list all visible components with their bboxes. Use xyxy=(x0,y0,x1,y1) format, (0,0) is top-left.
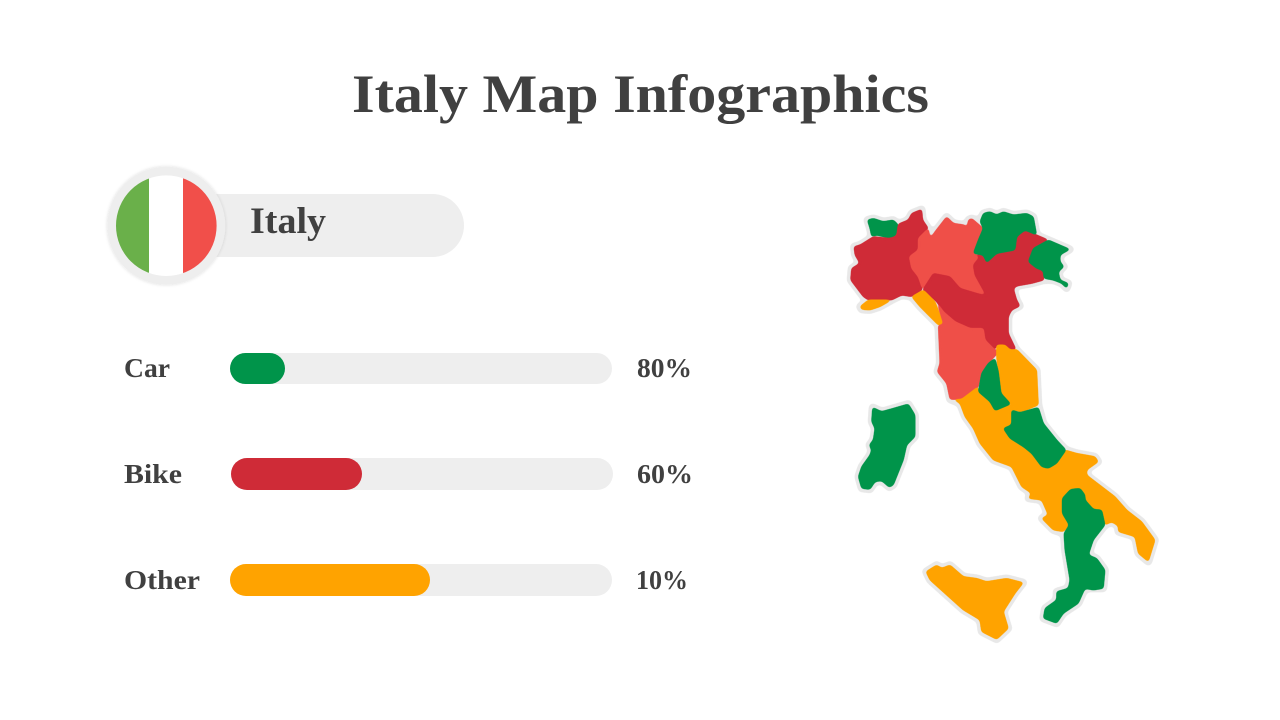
region: Umbria xyxy=(978,358,1011,411)
bar row: Car 80%: 80% xyxy=(637,353,692,383)
region: Tuscany xyxy=(937,302,1000,399)
country label pill xyxy=(170,194,464,257)
region: Liguria west xyxy=(860,300,892,310)
region: Marche xyxy=(997,345,1038,413)
island: Sicily xyxy=(926,565,1023,639)
region: Lombardy xyxy=(909,217,987,296)
map of Italy xyxy=(851,209,1155,639)
region: Trentino xyxy=(973,212,1037,263)
icon: Italian flag badge xyxy=(107,167,225,285)
region: Basilicata and Calabria xyxy=(1043,488,1105,623)
country name: Italy xyxy=(250,201,327,242)
island: Sardinia xyxy=(858,404,915,489)
bar row: Bike 60%: Bike xyxy=(124,459,182,489)
bar row: Car 80%: Car xyxy=(124,353,170,383)
bar row: Bike 60% xyxy=(124,458,693,490)
region: Friuli xyxy=(1028,240,1070,288)
region: Piedmont xyxy=(851,209,928,300)
region: Liguria east xyxy=(912,290,944,325)
title: Italy Map Infographics xyxy=(352,64,929,124)
region: Veneto and Emilia-Romagna xyxy=(923,230,1048,350)
region: Aosta Valley xyxy=(867,218,898,238)
panel: country header xyxy=(107,167,464,285)
bar row: Other 10% xyxy=(124,564,688,596)
region: Abruzzo and Molise xyxy=(1003,407,1066,468)
bar row: Other 10%: 10% xyxy=(636,565,688,595)
bar row: Bike 60%: 60% xyxy=(637,459,693,489)
bar row: Car 80% xyxy=(124,353,692,384)
bar row: Other 10%: Other xyxy=(124,565,200,595)
region: Lazio, Campania, Puglia xyxy=(953,387,1155,562)
map halo outline xyxy=(851,209,1155,639)
